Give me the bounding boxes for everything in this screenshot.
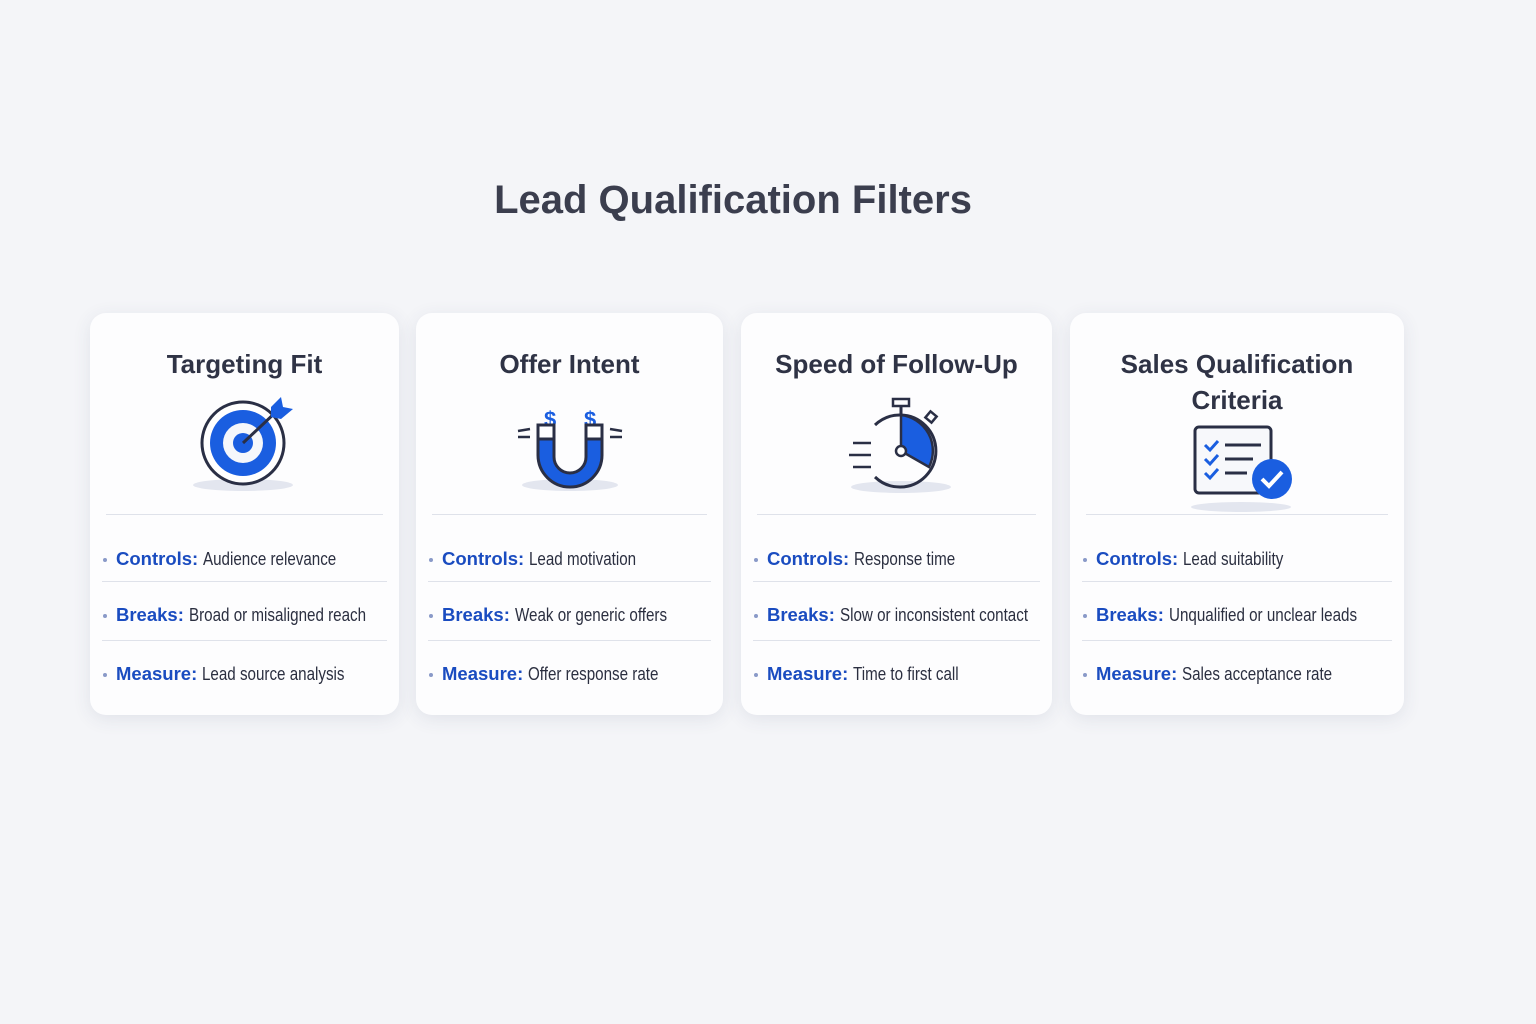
text: measure: Time to first call	[853, 663, 959, 684]
heading: Criteria	[1191, 385, 1283, 415]
text: breaks	[102, 602, 387, 641]
text: controls	[102, 546, 387, 582]
text: controls: Lead suitability	[1183, 548, 1284, 569]
text: measure: Measure:	[116, 663, 197, 684]
icon: checklist	[1191, 426, 1292, 512]
text: controls: Response time	[854, 548, 956, 569]
text: breaks: Weak or generic offers	[515, 604, 667, 625]
text: measure	[1082, 661, 1392, 719]
icon: magnet: $	[584, 407, 596, 432]
heading: Speed of Follow-Up	[775, 349, 1018, 379]
text: breaks: Slow or inconsistent contact	[840, 604, 1028, 625]
panel: offer intent	[416, 313, 723, 715]
text: controls: Controls:	[767, 548, 849, 569]
text: measure: Measure:	[1096, 663, 1177, 684]
text: measure	[428, 661, 711, 719]
text: controls: Controls:	[442, 548, 524, 569]
icon: magnet	[518, 407, 622, 491]
text: measure: Measure:	[767, 663, 848, 684]
heading: Targeting Fit	[167, 349, 322, 379]
text: breaks: Unqualified or unclear leads	[1169, 604, 1357, 625]
text: breaks: Breaks:	[442, 604, 510, 625]
text: breaks: Breaks:	[1096, 604, 1164, 625]
panel: sales qualification criteria	[1070, 313, 1404, 715]
text: measure: Sales acceptance rate	[1182, 663, 1332, 684]
text: measure: Offer response rate	[528, 663, 659, 684]
icon: stopwatch	[849, 398, 951, 493]
text: measure: Measure:	[442, 663, 523, 684]
icon: target	[193, 397, 293, 491]
text: measure	[753, 661, 1040, 719]
text: controls: Audience relevance	[203, 548, 337, 569]
icon: magnet: $	[544, 407, 556, 432]
text: breaks: Breaks:	[767, 604, 835, 625]
text: controls: Controls:	[1096, 548, 1178, 569]
title: Lead Qualification Filters	[494, 178, 972, 222]
text: breaks	[753, 602, 1040, 641]
text: controls	[1082, 546, 1392, 582]
text: breaks: Breaks:	[116, 604, 184, 625]
heading	[1121, 349, 1353, 415]
text: breaks: Broad or misaligned reach	[189, 604, 366, 625]
heading: Sales Qualification	[1121, 349, 1353, 379]
text: measure	[102, 661, 387, 719]
text: controls	[753, 546, 1040, 582]
text: measure: Lead source analysis	[202, 663, 345, 684]
heading: Offer Intent	[499, 349, 640, 379]
text: breaks	[1082, 602, 1392, 641]
panel: speed of follow-up	[741, 313, 1052, 715]
text: controls: Controls:	[116, 548, 198, 569]
panel: targeting fit	[90, 313, 399, 715]
text: controls: Lead motivation	[529, 548, 636, 569]
text: breaks	[428, 602, 711, 641]
text: controls	[428, 546, 711, 582]
